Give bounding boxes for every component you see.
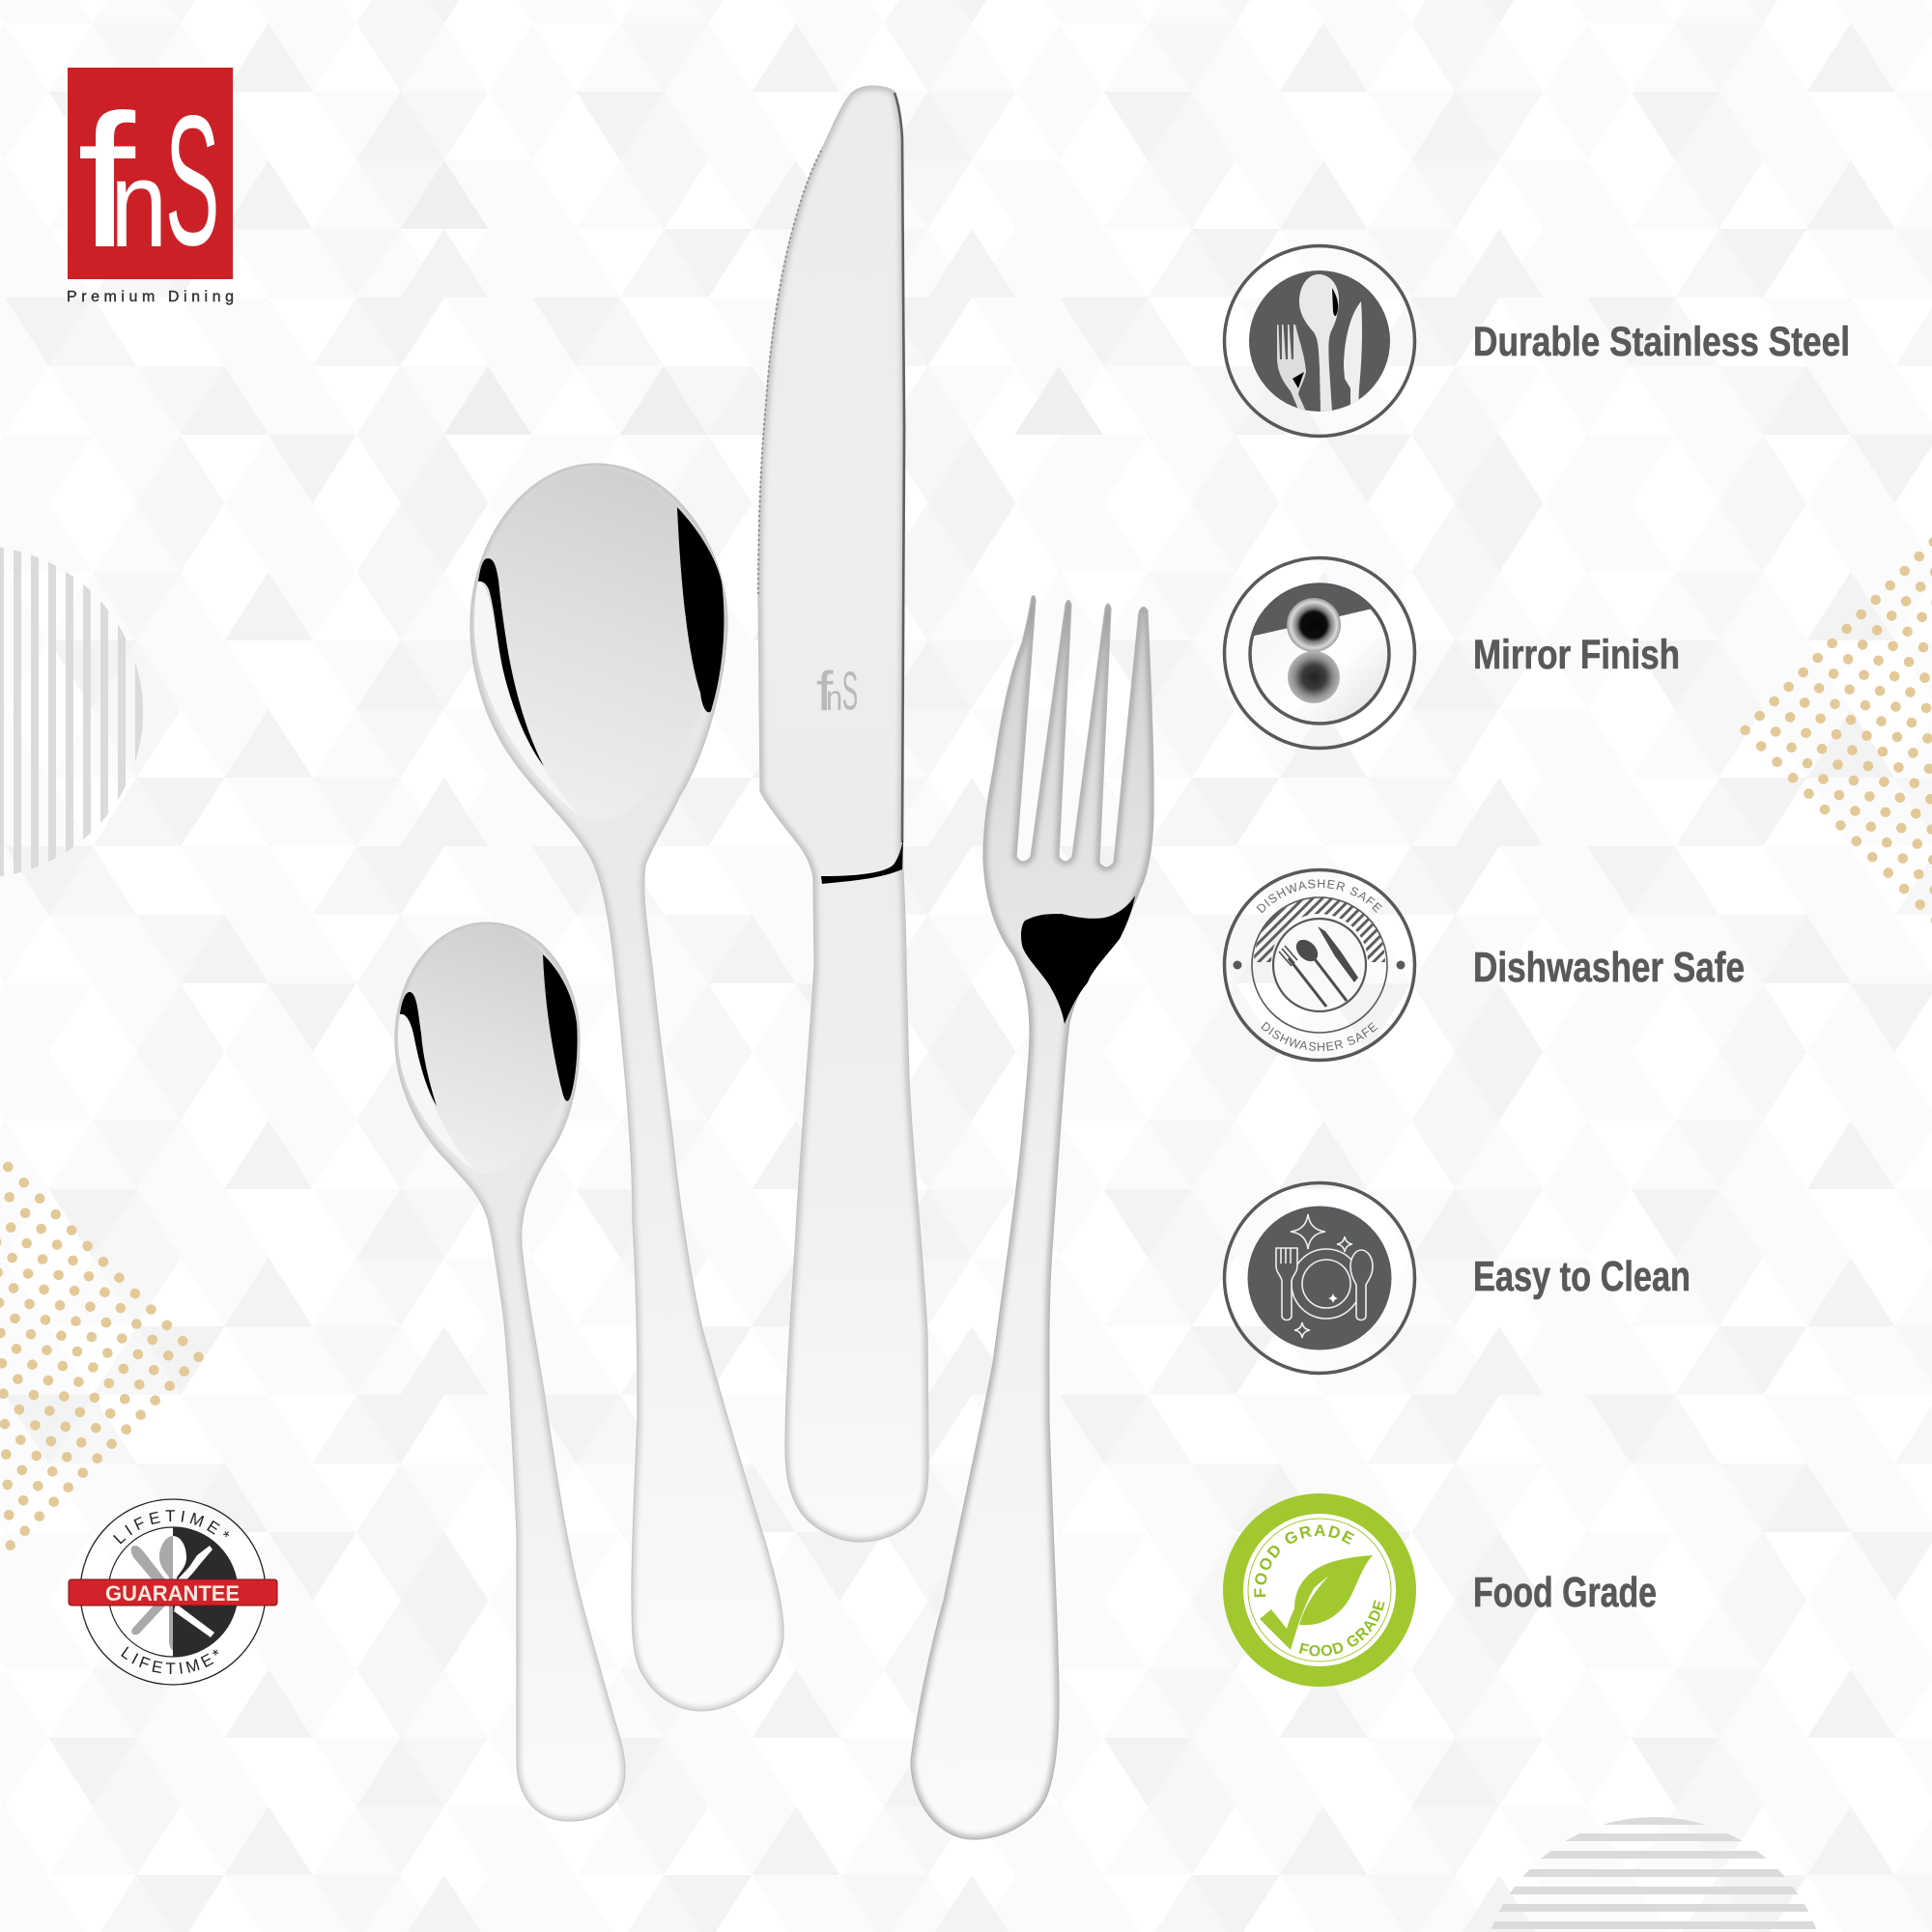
big spoon edge shading	[470, 464, 783, 1711]
badge plate	[108, 1527, 238, 1657]
badge ribbon text: GUARANTEE	[105, 1581, 240, 1605]
decorative dot diamond left	[0, 1162, 204, 1550]
small spoon bowl highlight	[398, 1014, 475, 1171]
knife bolster reflection	[821, 838, 903, 884]
big spoon bowl	[474, 468, 724, 821]
logo letters: n	[110, 135, 167, 272]
logo red square	[68, 68, 233, 279]
small spoon outline	[395, 923, 625, 1821]
knife edge shading	[758, 86, 928, 1542]
badge text bottom: LIFETIME*	[121, 1646, 218, 1674]
big spoon outline	[470, 464, 783, 1711]
badge cutlery left	[131, 1536, 173, 1650]
cutlery: small spoon	[395, 923, 625, 1821]
icon: dishwasher safe stamp	[1223, 867, 1416, 1063]
small spoon bowl	[398, 925, 577, 1174]
decorative striped half circle bottom	[1492, 1817, 1816, 1929]
badge dark half	[173, 1527, 236, 1657]
label: Easy to Clean	[1473, 1253, 1690, 1300]
fork reflection	[1021, 895, 1135, 1024]
icon: clean plate and cutlery	[1225, 1182, 1414, 1374]
feature: mirror finish	[1225, 558, 1680, 748]
knife brand mark	[816, 660, 858, 722]
logo letters	[77, 74, 219, 287]
knife brand mark: n	[826, 678, 842, 719]
icon: mirror ball	[1225, 558, 1414, 748]
logo letters: f	[77, 74, 136, 287]
small spoon reflections	[543, 954, 578, 1101]
knife serrated edge	[758, 151, 821, 594]
big spoon silhouette	[470, 464, 783, 1711]
feature: durable stainless steel	[1225, 245, 1850, 437]
fork silhouette	[911, 596, 1153, 1839]
logo tagline: Premium Dining	[67, 289, 234, 305]
fork edge shading	[911, 596, 1153, 1839]
small spoon edge shading	[395, 923, 625, 1821]
fork outline	[911, 596, 1153, 1839]
logo: fnS Premium Dining	[67, 68, 234, 305]
feature: dishwasher safe	[1223, 867, 1745, 1063]
cutlery: big spoon	[470, 464, 783, 1711]
small spoon silhouette	[395, 923, 625, 1821]
icon: cutlery in dark circle	[1225, 245, 1414, 437]
knife brand mark: f	[816, 660, 834, 722]
big spoon reflections	[677, 507, 724, 712]
label: Food Grade	[1473, 1569, 1657, 1616]
knife silhouette	[758, 86, 928, 1542]
knife dark spine	[895, 93, 904, 842]
badge text top: LIFETIME*	[113, 1510, 230, 1544]
cutlery: knife	[758, 86, 928, 1542]
badge rings	[80, 1499, 266, 1685]
lifetime guarantee badge	[68, 1498, 278, 1686]
badge ribbon	[69, 1579, 277, 1605]
icon: food grade seal	[1223, 1493, 1416, 1687]
icon: dishwasher safe stamp: DISHWASHER SAFE	[1261, 1022, 1378, 1051]
badge cutlery right	[173, 1536, 214, 1637]
icon: food grade seal: FOOD GRADE	[1254, 1524, 1354, 1598]
decorative striped half circle left	[0, 547, 143, 877]
feature: easy to clean	[1225, 1182, 1690, 1374]
logo letters: S	[165, 78, 219, 284]
label: Dishwasher Safe	[1473, 944, 1745, 991]
big spoon bowl highlight	[474, 582, 580, 816]
label: Mirror Finish	[1473, 632, 1680, 678]
feature: food grade	[1223, 1493, 1657, 1687]
icon: dishwasher safe stamp: DISHWASHER SAFE	[1256, 879, 1382, 914]
icon: food grade seal: FOOD GRADE	[1298, 1600, 1385, 1656]
knife outline	[758, 86, 928, 1542]
knife brand mark: S	[842, 662, 858, 722]
decorative dot diamond right	[1740, 537, 1932, 925]
label: Durable Stainless Steel	[1473, 319, 1850, 365]
cutlery: fork	[911, 596, 1153, 1839]
